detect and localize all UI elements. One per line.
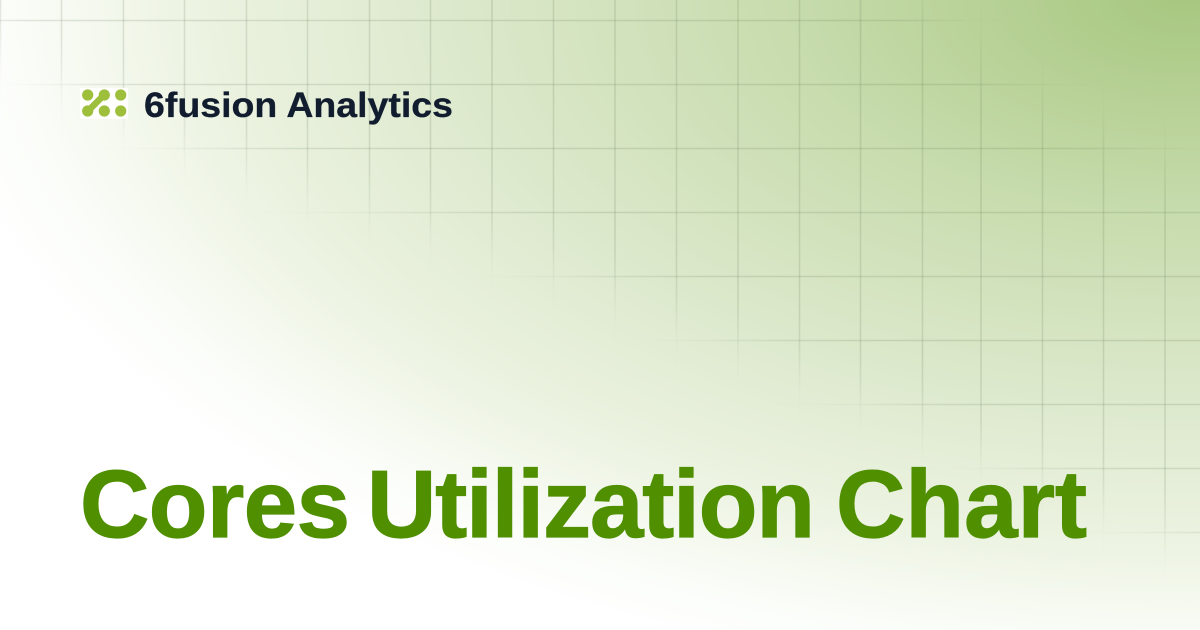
- title: [80, 451, 1087, 558]
- title: Cores: [80, 451, 350, 558]
- brand name: 6fusion Analytics: [144, 86, 453, 125]
- title: Utilization: [367, 451, 815, 558]
- brand logo: [80, 88, 128, 119]
- title: Chart: [836, 451, 1087, 558]
